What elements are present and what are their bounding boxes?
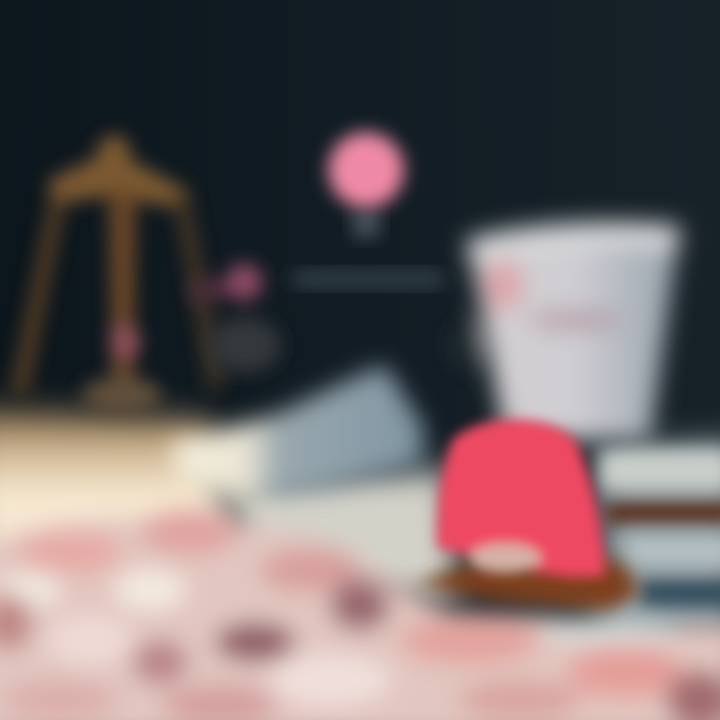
icon: balance scale bbox=[10, 135, 226, 413]
small pink flower bbox=[188, 263, 281, 373]
table surface bbox=[0, 408, 720, 640]
rolled tube bbox=[170, 365, 425, 500]
brown puddle bbox=[415, 560, 640, 612]
pink and white blanket bbox=[0, 510, 720, 720]
red object bbox=[437, 419, 605, 577]
blurred caption bbox=[292, 270, 444, 288]
icon: pink balloon bbox=[328, 132, 404, 239]
white cup bbox=[451, 222, 680, 440]
right side stripes bbox=[600, 450, 720, 608]
